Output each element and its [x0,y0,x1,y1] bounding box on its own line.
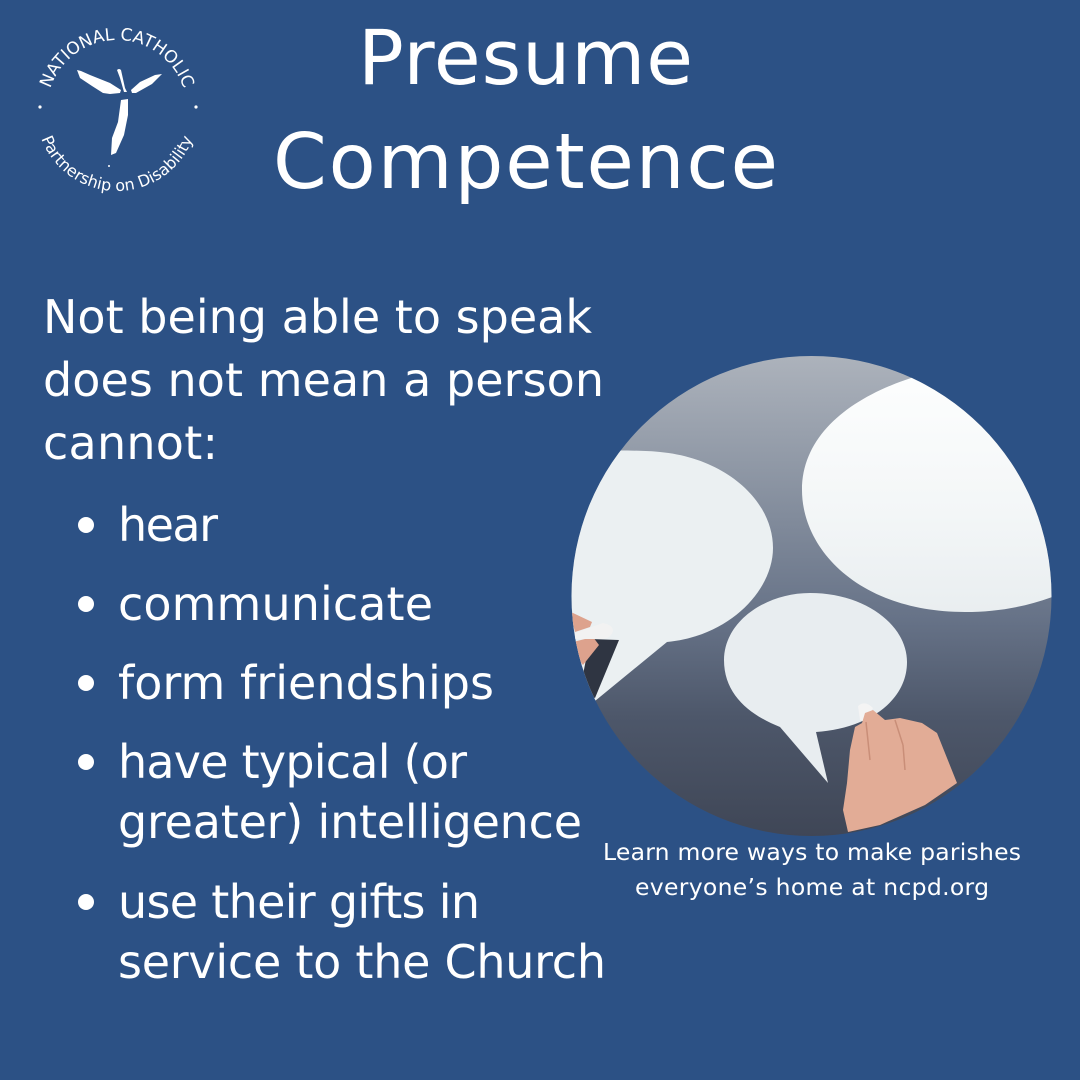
bullet: gifts in service: use their gifts in [118,875,480,929]
caption: Learn more ways to make parishes [603,838,1021,866]
speech bubble: upper right [802,370,1060,612]
logo figure: stylised cross [77,69,162,167]
bullet: form friendships: form friendships [118,656,494,710]
bullet: intelligence: have typical (or [118,735,467,789]
intro text: cannot: [43,416,218,470]
bullet list [78,498,606,989]
bullet: intelligence: greater) intelligence [118,795,582,849]
title: Competence [273,118,778,207]
bullet: communicate: communicate [118,577,433,631]
bullet: gifts in service: service to the Church [118,935,606,989]
left hand holding chalk [572,612,599,665]
caption [603,838,1021,901]
title [273,13,778,207]
logo: National Catholic Partnership on Disability [38,28,198,194]
logo text: top arc: NATIONAL CATHOLIC [39,28,194,88]
intro text: Not being able to speak [43,290,592,344]
speech bubble: left with tail [572,450,773,700]
intro text [43,290,604,470]
logo text: bottom arc: Partnership on Disability [42,135,194,194]
bullet: intelligence [78,735,582,849]
intro text: does not mean a person [43,353,604,407]
title: Presume [358,13,693,102]
speech bubble: lower centre with tail [724,593,907,783]
dark notch under left bubble [580,639,619,698]
bullet: hear: hear [118,498,218,552]
right hand holding chalk [843,703,957,832]
circular photo: speech bubbles on chalkboard [560,354,1060,838]
caption: everyone’s home at ncpd.org [635,873,989,901]
logo separator dots [38,105,198,109]
bullet: gifts in service [78,875,606,989]
